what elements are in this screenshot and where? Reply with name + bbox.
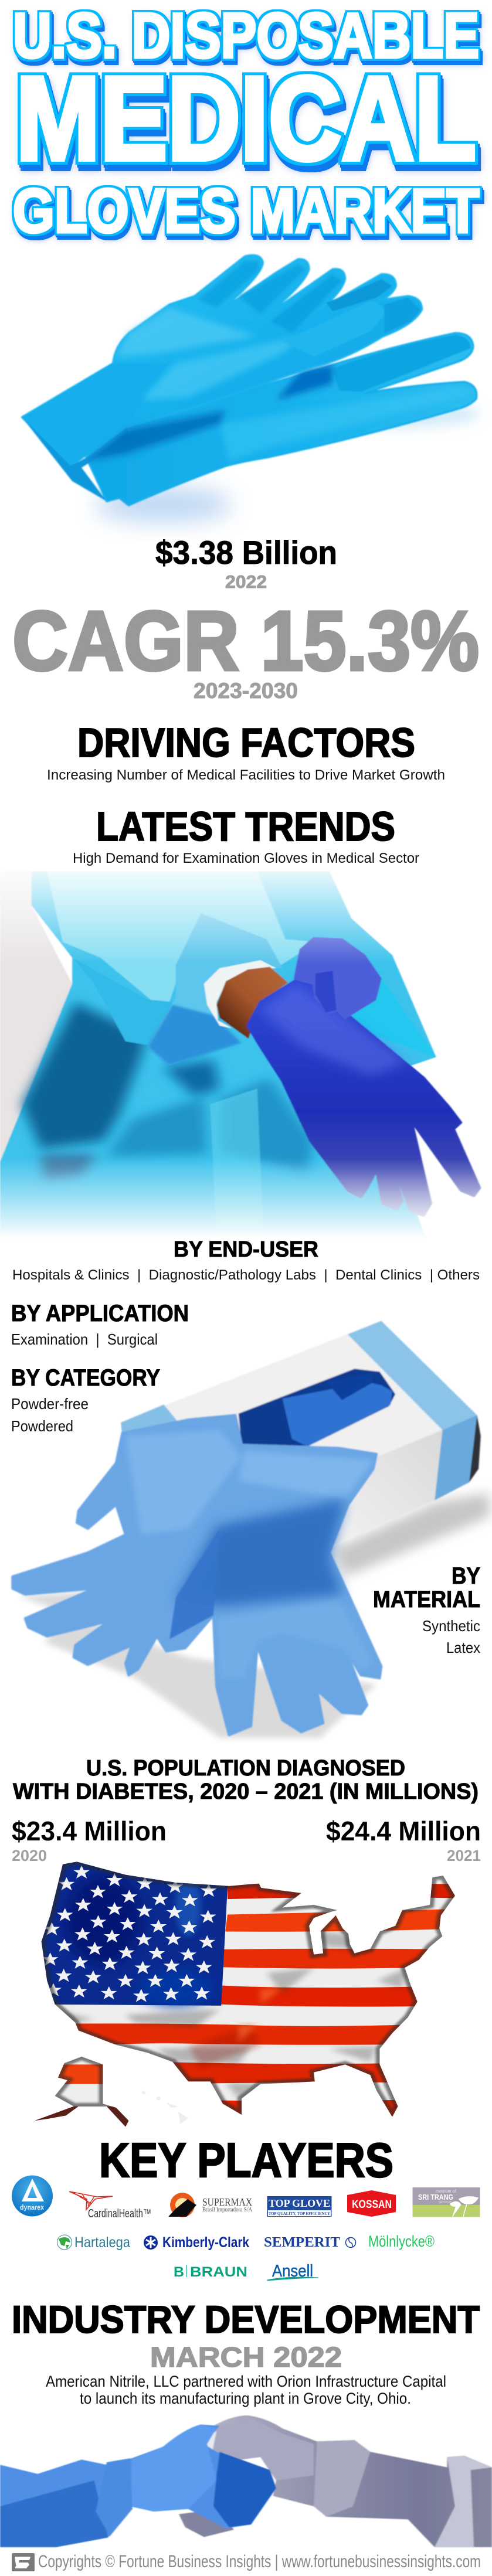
CAGR	[12, 594, 479, 703]
heading: material: MATERIAL	[373, 1587, 480, 1612]
driving factors text: Increasing Number of Medical Facilities to Drive Market Growth	[47, 767, 445, 783]
title	[13, 0, 479, 246]
heading line 2: WITH DIABETES, 2020 – 2021 (IN MILLIONS)	[13, 1779, 479, 1804]
stat: 2021	[326, 1816, 481, 1864]
material: synthetic: Synthetic	[422, 1617, 480, 1635]
logo: B. Braun: B	[174, 2264, 184, 2280]
latest trends text: High Demand for Examination Gloves in Medical Sector	[73, 850, 419, 866]
logos: key players	[12, 2176, 480, 2281]
logo: Sri Trang: member of	[436, 2189, 457, 2194]
driving factors	[47, 720, 445, 783]
logo: Dynarex	[12, 2176, 53, 2217]
heading line 1: U.S. POPULATION DIAGNOSED	[86, 1756, 405, 1781]
logo: Cardinal Health	[69, 2192, 151, 2220]
heading: by end-user: BY END-USER	[174, 1237, 318, 1262]
photo: glove box with gloves	[12, 1321, 490, 1738]
heading: latest trends: LATEST TRENDS	[96, 804, 395, 849]
development text line 2: to launch its manufacturing plant in Grove City, Ohio.	[80, 2390, 411, 2407]
logo: Sri Trang	[413, 2187, 480, 2217]
category: powder-free: Powder-free	[11, 1395, 89, 1413]
logo: B. Braun: BRAUN	[190, 2264, 247, 2280]
diabetes heading	[13, 1756, 479, 1804]
market value	[155, 534, 337, 592]
logo: Kossan: KOSSAN	[352, 2199, 392, 2211]
stat: 2020	[12, 1816, 167, 1864]
logo: Supermax: SUPERMAX	[202, 2196, 252, 2208]
logo: Ansell: Ansell	[272, 2262, 313, 2281]
footer	[12, 2552, 481, 2571]
stat: 2021: $24.4 Million	[326, 1816, 481, 1846]
heading: by category: BY CATEGORY	[11, 1365, 160, 1391]
end-user segments: Hospitals & Clinics | Diagnostic/Pathology Labs | Dental Clinics | Others	[12, 1267, 480, 1283]
value: $3.38 Billion: $3.38 Billion	[155, 534, 337, 571]
forecast period: 2023-2030	[194, 679, 298, 703]
stat: 2020: 2020	[12, 1847, 47, 1864]
year 2022: 2022	[225, 571, 267, 592]
by application	[11, 1301, 189, 1348]
logo: Supermax	[168, 2193, 253, 2217]
latest trends	[73, 804, 419, 866]
logo: B. Braun	[174, 2264, 247, 2280]
logo: Top Glove: TOP QUALITY, TOP EFFICIENCY	[269, 2211, 331, 2216]
application segments: Examination | Surgical	[11, 1330, 158, 1348]
logo: Semperit: SEMPERIT	[264, 2235, 340, 2250]
industry development	[12, 2298, 480, 2407]
development text line 1: American Nitrile, LLC partnered with Orion Infrastructure Capital	[46, 2373, 446, 2390]
material: latex: Latex	[446, 1639, 480, 1656]
heading: driving factors: DRIVING FACTORS	[77, 720, 415, 765]
heading: by: BY	[452, 1563, 480, 1589]
logo: Sri Trang: SRI TRANG	[418, 2193, 453, 2201]
logo: Cardinal Health: CardinalHealth™	[88, 2207, 151, 2220]
logo: Sri Trang: GROUP	[439, 2201, 452, 2204]
photo: gown and glove	[0, 872, 480, 1240]
footer logo	[12, 2553, 35, 2571]
logo: Hartalega	[57, 2234, 130, 2251]
category: powdered: Powdered	[11, 1417, 73, 1435]
logo: Dynarex: dynarex	[20, 2203, 44, 2211]
by category	[11, 1365, 160, 1435]
stat: 2020: $23.4 Million	[12, 1816, 167, 1846]
logo: Supermax: Brasil Importadora S/A	[202, 2207, 253, 2213]
illustration: blue medical gloves	[22, 255, 480, 522]
logo: Top Glove: TOP GLOVE	[269, 2197, 330, 2209]
stat: 2021: 2021	[447, 1847, 481, 1864]
by material	[373, 1563, 480, 1656]
photo: gloved handshake	[0, 2415, 492, 2547]
date: March 2022: MARCH 2022	[150, 2342, 342, 2373]
logo: Top Glove	[267, 2196, 332, 2217]
logo: Hartalega: Hartalega	[74, 2234, 130, 2251]
heading: by application: BY APPLICATION	[11, 1301, 189, 1326]
by end-user	[12, 1237, 480, 1283]
logo: Kossan	[347, 2190, 396, 2217]
logo: Mölnlycke: Mölnlycke®	[368, 2233, 435, 2250]
logo: Kimberly-Clark: Kimberly-Clark	[162, 2234, 249, 2251]
heading: key players: KEY PLAYERS	[99, 2133, 393, 2187]
map: U.S. flag	[32, 1858, 464, 2130]
